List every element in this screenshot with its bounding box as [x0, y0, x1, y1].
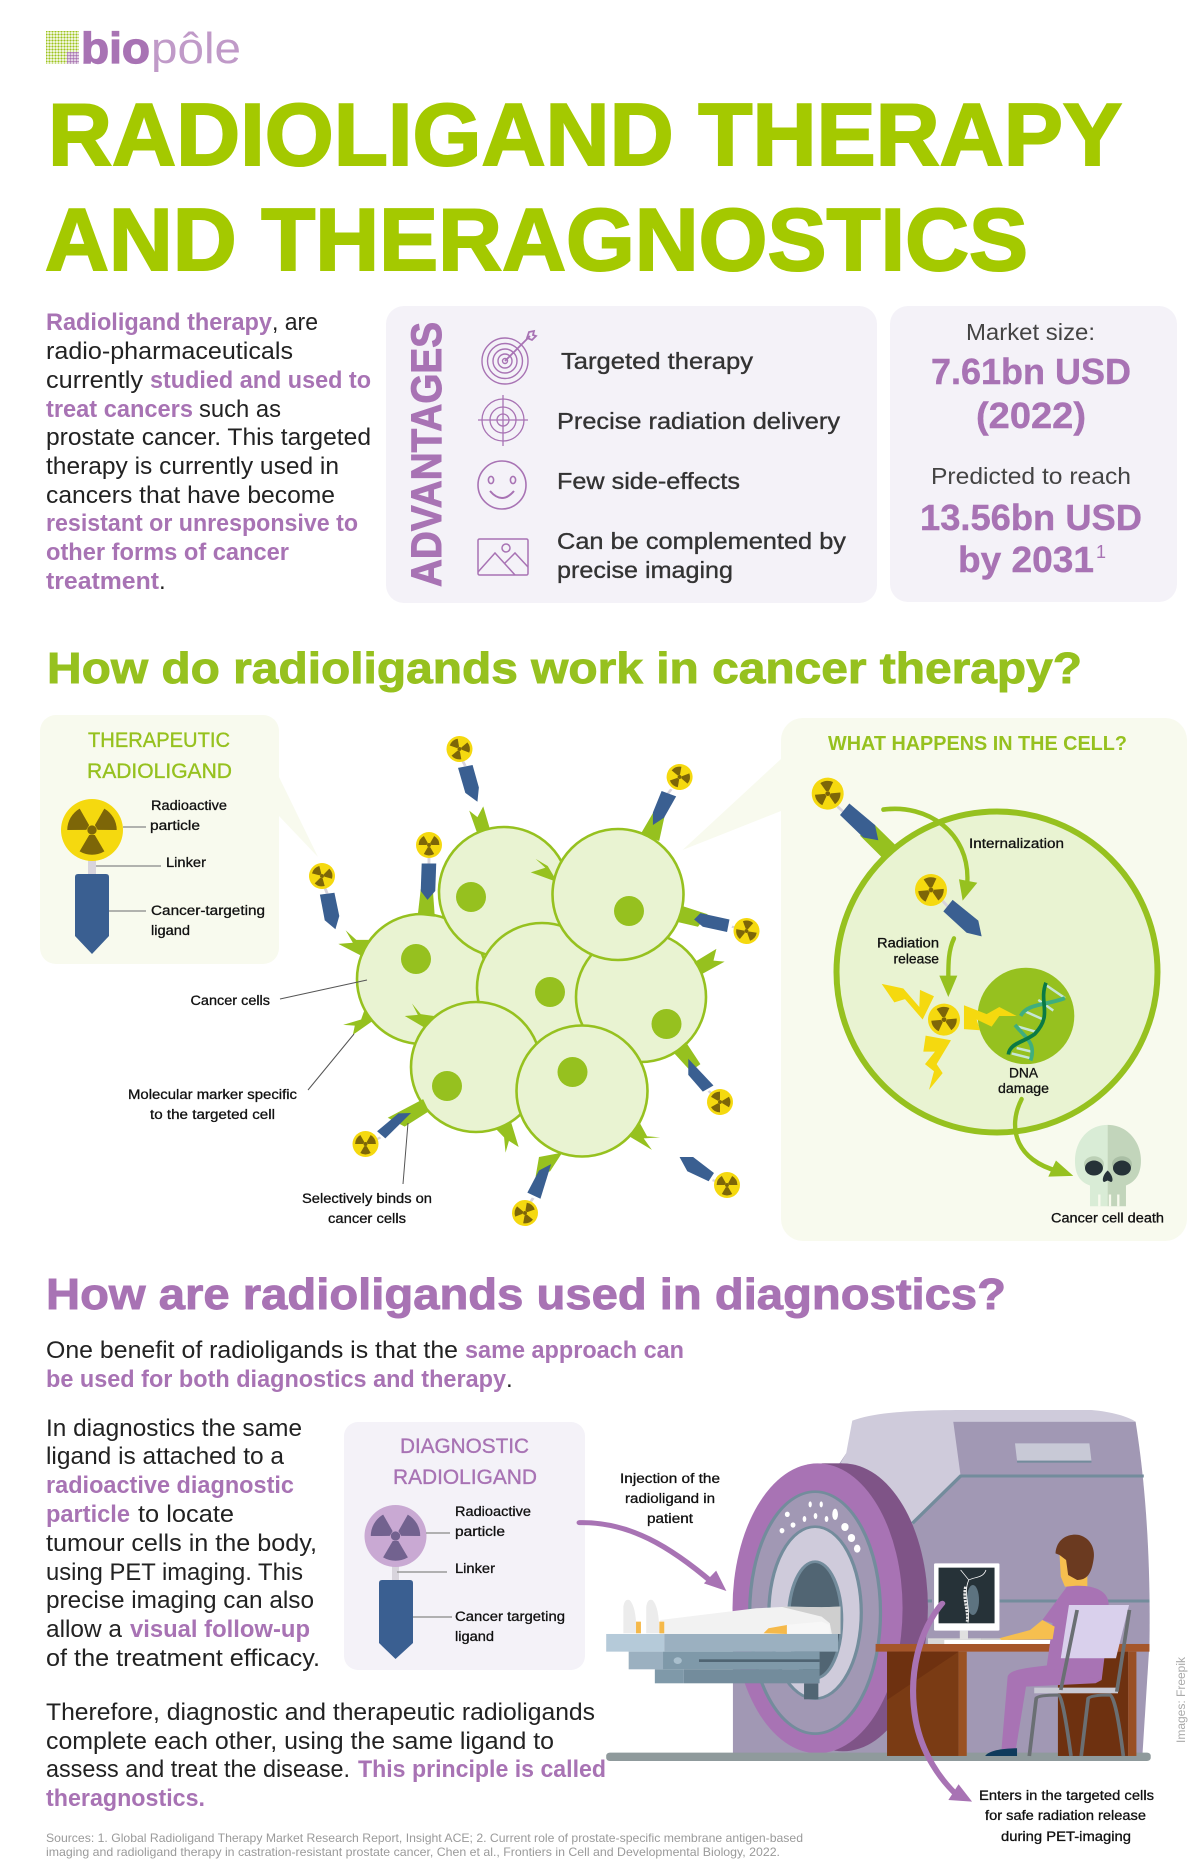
intro text block: therapy is currently used in — [46, 453, 339, 480]
panel: market size: Market size: — [966, 319, 1095, 345]
text: diagnostics explanation: particle — [46, 1501, 130, 1528]
scanner labels: Injection of the — [620, 1471, 720, 1486]
scanner labels: for safe radiation release — [985, 1808, 1146, 1823]
text: benefit: same approach can — [465, 1337, 684, 1364]
panel: diagnostic radioligand — [344, 1422, 585, 1670]
advantage labels: Targeted therapy — [561, 348, 754, 374]
sources — [46, 1831, 803, 1859]
icon: skull — [1075, 1125, 1141, 1206]
cell labels and leaders: Molecular marker specific — [128, 1087, 297, 1102]
patient on bed — [606, 1600, 840, 1699]
intro text block: treat cancers — [46, 396, 193, 423]
panel: therapeutic radioligand — [40, 715, 318, 964]
icon: target — [482, 331, 536, 384]
cell labels and leaders: cancer cells — [328, 1211, 406, 1226]
panel: therapeutic radioligand: Cancer-targeting — [151, 903, 265, 918]
text: theragnostics conclusion: This principle is called — [358, 1756, 606, 1783]
image credit: Images: Freepik — [1176, 1657, 1188, 1743]
title: RADIOLIGAND THERAPY — [48, 85, 1122, 184]
intro text block: currently — [46, 367, 143, 394]
intro text block: other forms of cancer — [46, 539, 289, 566]
panel: therapeutic radioligand: particle — [150, 818, 200, 833]
text: diagnostics explanation: ligand is attached to a — [46, 1443, 285, 1470]
sources: imaging and radioligand therapy in castration-resistant prostate cancer, Chen et al., Frontiers in Cell and Developmental Biology, 2022. — [46, 1845, 780, 1859]
panel: market size: 1 — [1096, 542, 1106, 562]
arrows and lightning — [837, 804, 1073, 1177]
text: benefit: . — [506, 1366, 513, 1393]
panel: diagnostic radioligand: DIAGNOSTIC — [400, 1435, 529, 1458]
intro text block — [46, 309, 371, 595]
cell labels — [877, 836, 1164, 1226]
desk — [876, 1644, 1149, 1756]
icon: crosshair — [478, 395, 528, 446]
intro text block: Radioligand therapy — [46, 309, 273, 336]
logo: biopôle — [46, 24, 241, 73]
technician — [985, 1535, 1129, 1756]
panel: market size: 7.61bn USD — [931, 351, 1131, 392]
logo: biopôle: bio — [81, 24, 150, 73]
logo: biopôle: pôle — [151, 24, 241, 73]
scanner labels: during PET-imaging — [1001, 1829, 1131, 1844]
intro text block: studied and used to — [150, 367, 371, 394]
cell labels: Cancer cell death — [1051, 1210, 1164, 1226]
advantage labels: Few side-effects — [557, 468, 740, 494]
panel: diagnostic radioligand: particle — [455, 1524, 505, 1539]
text: benefit — [46, 1337, 684, 1393]
text: benefit: One benefit of radioligands is that the — [46, 1337, 458, 1364]
intro text block: resistant or unresponsive to — [46, 510, 358, 537]
title — [45, 85, 1122, 289]
intro text block: radio-pharmaceuticals — [46, 338, 293, 365]
text: theragnostics conclusion — [46, 1699, 606, 1812]
intro text block: prostate cancer. This targeted — [46, 424, 371, 451]
text: diagnostics explanation: tumour cells in the body, — [46, 1530, 317, 1557]
scanner labels: patient — [647, 1511, 693, 1526]
cell outlines and nuclei — [357, 827, 706, 1156]
heading: how do radioligands work: How do radioligands work in cancer therapy? — [47, 644, 1082, 693]
panel: diagnostic radioligand: RADIOLIGAND — [393, 1466, 537, 1489]
cell labels: DNA — [1009, 1066, 1038, 1080]
cell labels: Radiation — [877, 936, 939, 950]
panel: therapeutic radioligand: ligand — [151, 923, 190, 938]
cell labels: damage — [998, 1081, 1049, 1096]
intro text block: , are — [272, 309, 318, 336]
scanner labels: radioligand in — [625, 1491, 715, 1506]
cell labels and leaders: to the targeted cell — [150, 1107, 275, 1122]
scanner labels — [620, 1471, 1154, 1844]
scanner ring — [733, 1463, 928, 1753]
intro text block: treatment — [46, 568, 159, 595]
cell labels and leaders — [128, 980, 432, 1226]
panel: market size — [890, 306, 1177, 602]
panel: market size: 13.56bn USD — [920, 497, 1142, 538]
text: theragnostics conclusion: theragnostics. — [46, 1785, 205, 1812]
icon: smiley — [478, 461, 526, 509]
scanner body — [733, 1410, 1150, 1753]
intro text block: . — [159, 568, 166, 595]
particles in cell — [806, 772, 965, 1041]
arrow: injection — [580, 1523, 726, 1591]
radioligand symbol — [61, 799, 123, 954]
text: benefit: be used for both diagnostics and therapy — [46, 1366, 507, 1393]
panel: therapeutic radioligand: Linker — [166, 855, 207, 870]
title: AND THERAGNOSTICS — [45, 190, 1028, 289]
advantage labels: precise imaging — [557, 557, 733, 583]
text: theragnostics conclusion: assess and treat the disease. — [46, 1756, 350, 1783]
nucleus with DNA — [978, 968, 1074, 1064]
molecular markers and ligands — [320, 761, 739, 1202]
diagnostic symbol — [364, 1505, 426, 1659]
panel: diagnostic radioligand: Cancer targeting — [455, 1609, 565, 1624]
text: diagnostics explanation: radioactive diagnostic — [46, 1472, 294, 1499]
large cell — [836, 812, 1158, 1132]
panel: what happens in the cell — [682, 718, 1187, 1241]
panel: therapeutic radioligand: THERAPEUTIC — [88, 729, 230, 752]
text: diagnostics explanation: visual follow-up — [130, 1616, 310, 1643]
illustration: PET scanner room — [580, 1410, 1151, 1802]
advantage labels — [557, 348, 847, 583]
advantage labels: Can be complemented by — [557, 528, 847, 554]
panel: market size: (2022) — [976, 395, 1086, 436]
arrow: enters cells — [913, 1603, 972, 1802]
panel: market size: Predicted to reach — [931, 463, 1131, 489]
monitor with spine image — [928, 1563, 1051, 1644]
sources: Sources: 1. Global Radioligand Therapy Market Research Report, Insight ACE; 2. Current role of prostate-specific membrane antigen-based — [46, 1831, 803, 1845]
cell labels and leaders: Cancer cells — [190, 993, 270, 1008]
scanner labels: Enters in the targeted cells — [979, 1788, 1154, 1803]
text: diagnostics explanation: precise imaging can also — [46, 1587, 314, 1614]
panel: therapeutic radioligand: RADIOLIGAND — [87, 760, 232, 783]
text: diagnostics explanation: to locate — [138, 1501, 234, 1528]
radioactive particles — [306, 732, 763, 1228]
icon: image — [478, 539, 528, 575]
text: diagnostics explanation — [46, 1415, 320, 1672]
cell labels: release — [894, 952, 939, 967]
panel: therapeutic radioligand: Radioactive — [151, 798, 227, 813]
text: diagnostics explanation: using PET imaging. This — [46, 1559, 303, 1586]
heading: how are radioligands used: How are radioligands used in diagnostics? — [46, 1270, 1006, 1319]
advantages heading: ADVANTAGES — [403, 322, 451, 587]
text: theragnostics conclusion: complete each other, using the same ligand to — [46, 1728, 554, 1755]
panel: market size: by 2031 — [958, 539, 1094, 580]
advantage labels: Precise radiation delivery — [557, 408, 841, 434]
panel: diagnostic radioligand: Radioactive — [455, 1504, 531, 1519]
panel: what happens in the cell: WHAT HAPPENS IN THE CELL? — [828, 733, 1127, 755]
floor — [606, 1753, 1151, 1761]
cell labels and leaders: Selectively binds on — [302, 1191, 432, 1206]
panel: diagnostic radioligand: Linker — [455, 1561, 496, 1576]
intro text block: cancers that have become — [46, 482, 335, 509]
text: diagnostics explanation: of the treatment efficacy. — [46, 1645, 320, 1672]
text: diagnostics explanation: allow a — [46, 1616, 123, 1643]
text: diagnostics explanation: In diagnostics the same — [46, 1415, 302, 1442]
intro text block: such as — [199, 396, 281, 423]
text: theragnostics conclusion: Therefore, diagnostic and therapeutic radioligands — [46, 1699, 595, 1726]
panel: diagnostic radioligand: ligand — [455, 1629, 494, 1644]
chart: cancer cell cluster — [128, 732, 763, 1228]
panel: advantages — [386, 306, 877, 603]
cell labels: Internalization — [969, 836, 1064, 851]
